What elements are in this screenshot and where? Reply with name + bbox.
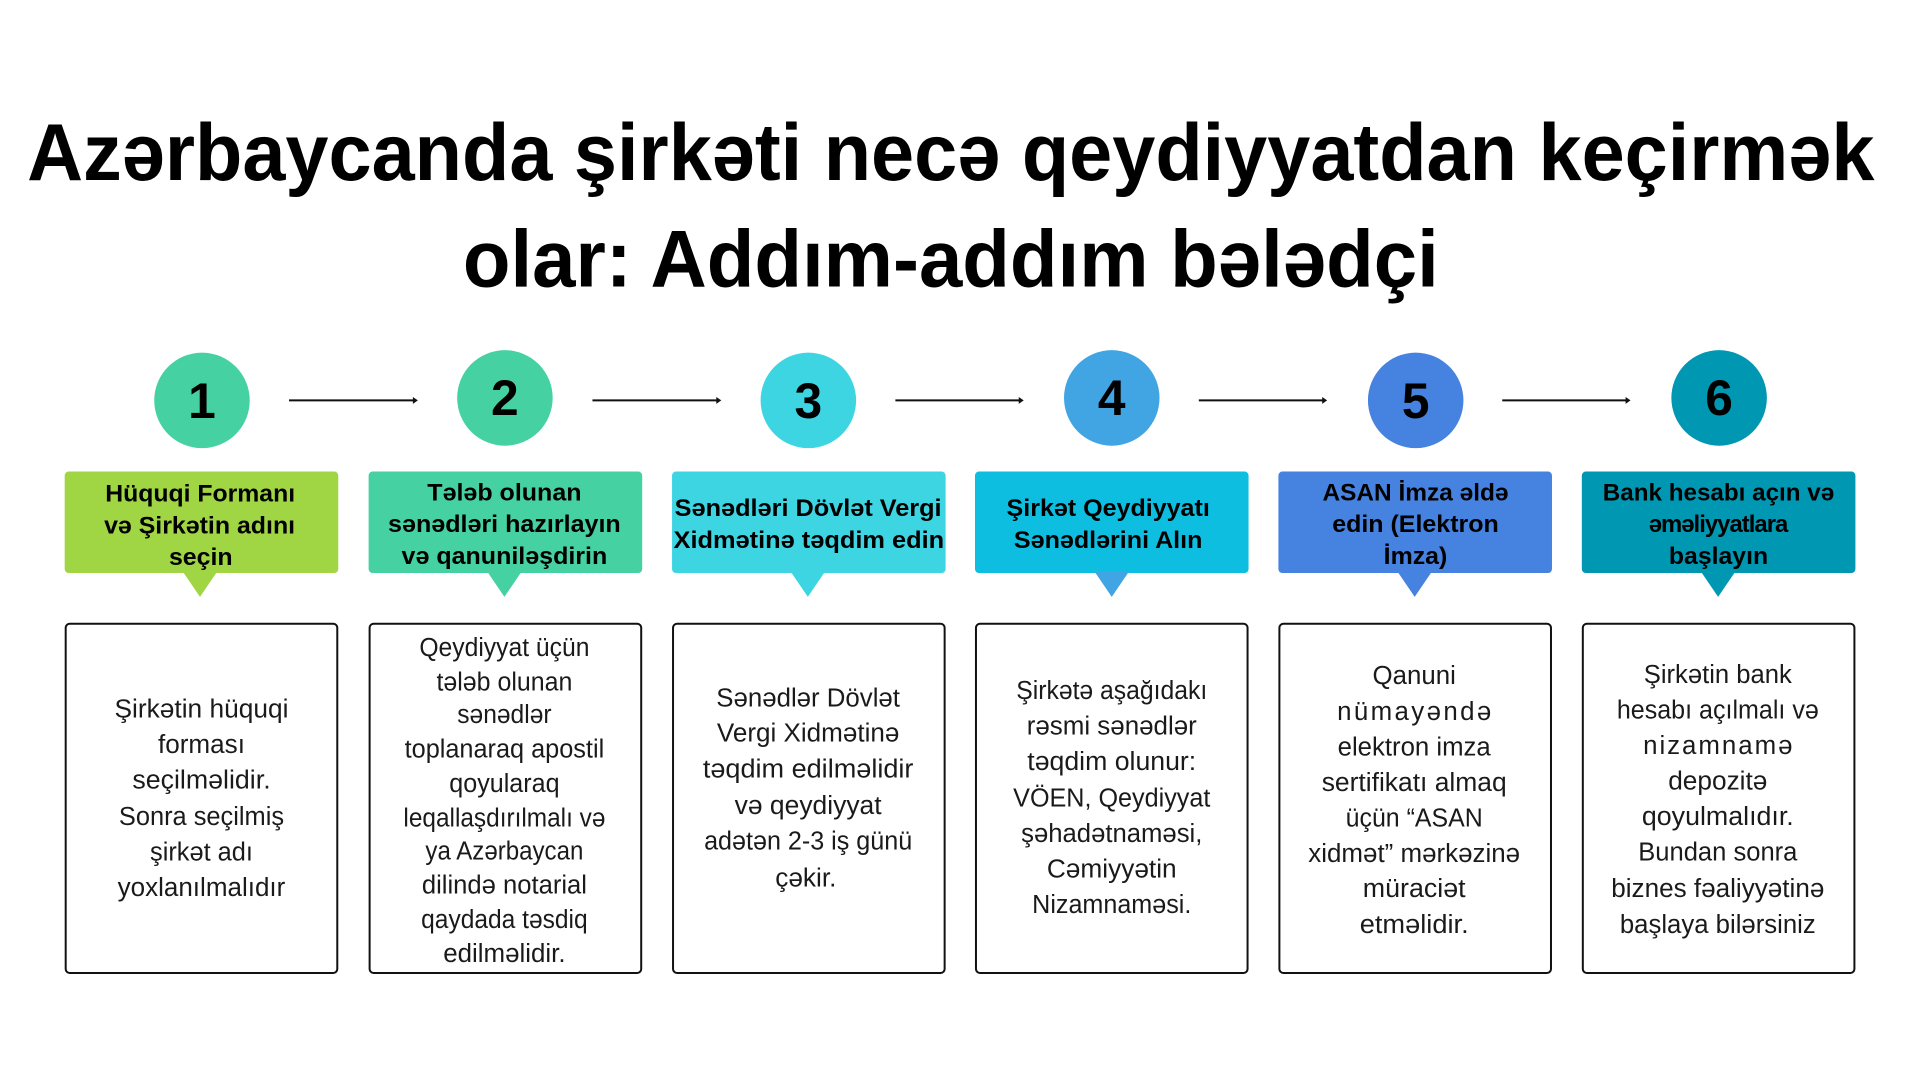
description box 3: çəkir. xyxy=(775,864,836,892)
description box 4: şəhadətnaməsi, xyxy=(1021,820,1202,848)
description box 3: Sənədlər Dövlət xyxy=(716,684,900,712)
callout 6: əməliyyatlara xyxy=(1649,511,1789,538)
description box 5: müraciət xyxy=(1363,875,1466,903)
description box 5: üçün “ASAN xyxy=(1346,804,1483,832)
description box 6: nizamnamə xyxy=(1643,732,1793,760)
description box 4: Şirkətə aşağıdakı xyxy=(1016,677,1207,705)
callout 2 xyxy=(369,472,642,597)
description box 6: qoyulmalıdır. xyxy=(1642,803,1794,831)
callout 4 xyxy=(975,472,1249,597)
callout 1 xyxy=(65,472,338,597)
description box 6: depozitə xyxy=(1668,768,1767,796)
step 3 number circle xyxy=(761,353,856,448)
description box 3: adətən 2-3 iş günü xyxy=(704,828,912,856)
description box 1: şirkət adı xyxy=(150,839,253,867)
description box 6: Bundan sonra xyxy=(1638,839,1798,867)
callout 6 xyxy=(1582,472,1855,597)
description box 4: Nizamnaməsi. xyxy=(1032,891,1191,919)
arrow 4 to 5 xyxy=(1199,397,1327,404)
description box 2: tələb olunan xyxy=(436,668,572,696)
description box 6: başlaya bilərsiniz xyxy=(1620,911,1816,939)
callout 4: Sənədlərini Alın xyxy=(1014,527,1202,554)
description box 5: sertifikatı almaq xyxy=(1322,769,1507,797)
callout 4: Şirkət Qeydiyyatı xyxy=(1007,495,1210,522)
title xyxy=(27,108,1875,305)
step 5 number circle xyxy=(1368,353,1463,448)
description box 1: yoxlanılmalıdır xyxy=(118,874,286,902)
description box 1: seçilməlidir. xyxy=(132,766,271,794)
description box 2: qaydada təsdiq xyxy=(421,906,588,934)
step 1 number circle xyxy=(154,353,250,448)
description box 3 xyxy=(673,624,945,973)
step 5 number circle: 5 xyxy=(1402,373,1430,429)
step 6 number circle: 6 xyxy=(1705,370,1733,426)
arrow 2 to 3 xyxy=(592,397,721,404)
description box 2: leqallaşdırılmalı və xyxy=(403,804,605,832)
step 6 number circle xyxy=(1671,350,1767,446)
callout 5: İmza) xyxy=(1384,543,1447,570)
callout 5: edin (Elektron xyxy=(1332,511,1499,538)
description box 3: təqdim edilməlidir xyxy=(703,755,914,783)
description box 5: Qanuni xyxy=(1373,662,1456,690)
callout 6: başlayın xyxy=(1669,543,1768,570)
arrow 1 to 2 xyxy=(289,397,418,404)
callout 1: və Şirkətin adını xyxy=(104,512,295,539)
description box 2: sənədlər xyxy=(457,701,552,729)
callout 3: Xidmətinə təqdim edin xyxy=(674,527,944,554)
description box 3: və qeydiyyat xyxy=(735,792,882,820)
step 2 number circle: 2 xyxy=(491,370,519,426)
callout 1: Hüquqi Formanı xyxy=(105,480,295,507)
description box 5: etməlidir. xyxy=(1360,911,1469,939)
description box 2: edilməlidir. xyxy=(443,940,566,968)
callout 3 xyxy=(672,472,946,597)
callout 2: və qanuniləşdirin xyxy=(402,543,607,570)
callout 2: Tələb olunan xyxy=(427,479,582,506)
description box 2: toplanaraq apostil xyxy=(405,736,604,764)
description box 1: Sonra seçilmiş xyxy=(119,803,284,831)
callout 5: ASAN İmza əldə xyxy=(1322,479,1509,506)
description box 6: Şirkətin bank xyxy=(1644,661,1792,689)
arrow 3 to 4 xyxy=(895,397,1024,404)
title: olar: Addım-addım bələdçi xyxy=(463,215,1439,305)
description box 1 xyxy=(66,624,337,973)
callout 3: Sənədləri Dövlət Vergi xyxy=(675,495,942,522)
step 1 number circle: 1 xyxy=(188,373,216,429)
step 3 number circle: 3 xyxy=(795,373,822,429)
callout 6: Bank hesabı açın və xyxy=(1603,479,1834,506)
description box 4: təqdim olunur: xyxy=(1027,748,1196,776)
description box 2: Qeydiyyat üçün xyxy=(419,634,589,662)
description box 1: forması xyxy=(158,731,245,759)
description box 5: nümayəndə xyxy=(1337,698,1491,726)
step 2 number circle xyxy=(457,350,553,446)
step 4 number circle xyxy=(1064,350,1160,446)
description box 4 xyxy=(976,624,1248,973)
callout 5 xyxy=(1278,472,1552,597)
callout 2: sənədləri hazırlayın xyxy=(388,511,621,538)
description box 4: Cəmiyyətin xyxy=(1047,856,1177,884)
description box 4: rəsmi sənədlər xyxy=(1027,712,1197,740)
callout 1: seçin xyxy=(169,544,233,571)
step 4 number circle: 4 xyxy=(1098,370,1126,426)
description box 6: hesabı açılmalı və xyxy=(1617,697,1819,725)
description box 2: ya Azərbaycan xyxy=(425,837,583,865)
arrow 5 to 6 xyxy=(1502,397,1631,404)
description box 6 xyxy=(1583,624,1854,973)
description box 5: elektron imza xyxy=(1338,733,1491,761)
description box 4: VÖEN, Qeydiyyat xyxy=(1013,785,1210,813)
description box 5: xidmət” mərkəzinə xyxy=(1308,840,1520,868)
description box 5 xyxy=(1279,624,1551,973)
title: Azərbaycanda şirkəti necə qeydiyyatdan keçirmək xyxy=(27,108,1875,198)
description box 2: qoyularaq xyxy=(449,770,560,798)
description box 2: dilində notarial xyxy=(422,872,587,900)
description box 1: Şirkətin hüquqi xyxy=(115,695,288,723)
description box 3: Vergi Xidmətinə xyxy=(717,720,899,748)
description box 6: biznes fəaliyyətinə xyxy=(1611,875,1824,903)
description box 2 xyxy=(370,624,641,973)
